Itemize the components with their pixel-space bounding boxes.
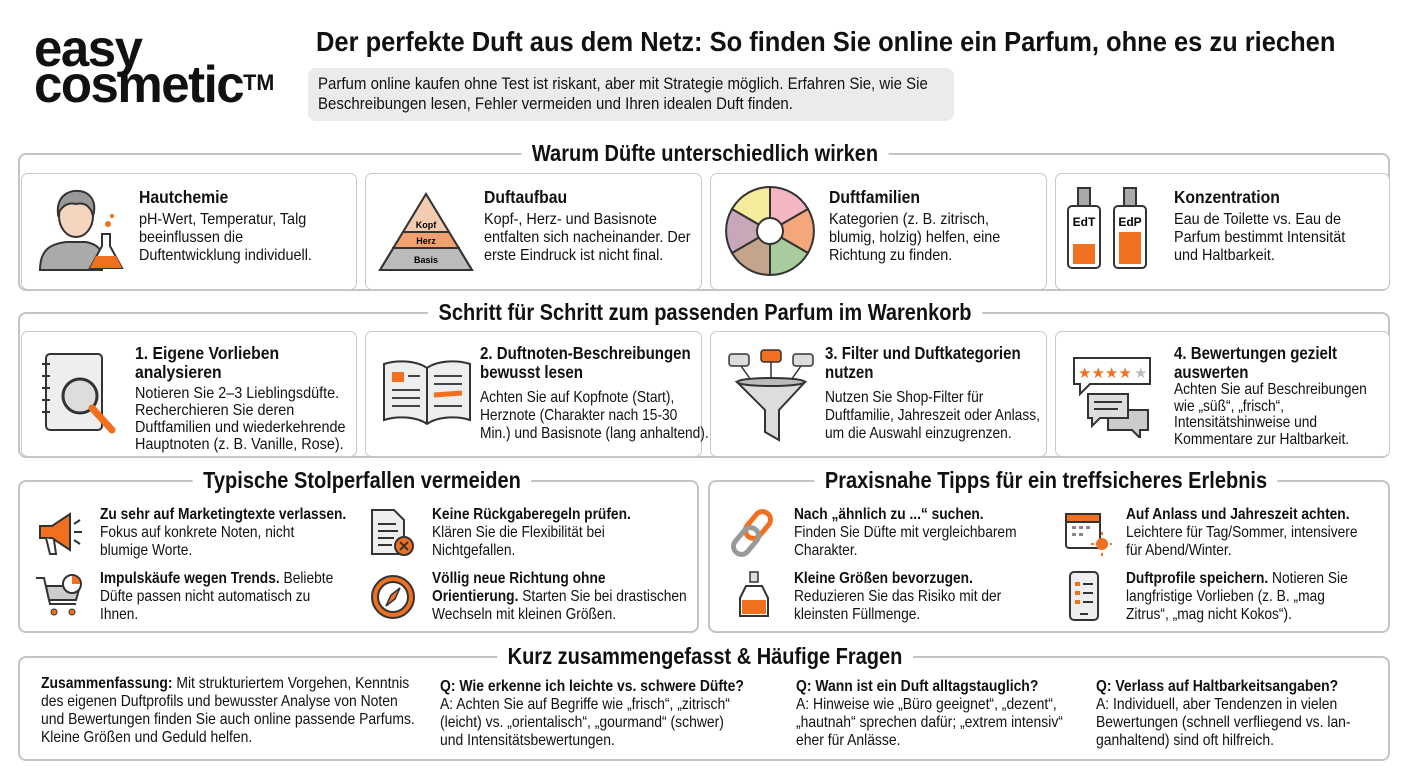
text: FAQ 1: (leicht) vs. „orientalisch“, „gourmand“ (schwer) — [440, 714, 724, 731]
text: Intensitätshinweise und — [1174, 414, 1317, 431]
logo: cosmeticTM — [34, 56, 274, 114]
text: FAQ 1: Q: Wie erkenne ich leichte vs. schwere Düfte? — [440, 678, 744, 695]
icon: megaphone — [39, 512, 82, 555]
icon: compass — [371, 575, 415, 619]
item: kleine Größen: Kleine Größen bevorzugen. — [794, 570, 973, 587]
icon: notebook with magnifier — [42, 353, 116, 434]
panel: Schritt für Schritt — [18, 312, 1390, 458]
text: pH-Wert, Temperatur, Talg — [139, 211, 306, 228]
icon: pyramid: Basis — [414, 255, 438, 265]
icon: calendar with sun — [1065, 513, 1112, 556]
item: Marketingtexte: Fokus auf konkrete Noten, nicht — [100, 524, 294, 541]
text: FAQ 2: A: Hinweise wie „Büro geeignet“, „dezent“, — [796, 696, 1057, 713]
item: ähnlich zu: Finden Sie Düfte mit vergleichbarem — [794, 524, 1017, 541]
text: analysieren — [135, 362, 222, 382]
panel: Typische Stolperfallen vermeiden — [18, 480, 699, 633]
text: 2. Duftnoten-Beschreibungen — [480, 343, 691, 363]
text: Duftfamilien — [829, 187, 920, 207]
text: FAQ 2 — [796, 678, 1063, 749]
item: Anlass und Jahreszeit — [1065, 506, 1357, 559]
icon: small perfume bottle — [739, 571, 769, 617]
item: Impulskäufe: Impulskäufe wegen Trends. Beliebte — [100, 570, 333, 587]
text: Achten Sie auf Beschreibungen — [1174, 381, 1367, 398]
heading: Typische Stolperfallen vermeiden — [203, 467, 521, 493]
text: FAQ 2: eher für Anlässe. — [796, 732, 900, 749]
text: summary: und Bewertungen finden Sie auch online passende Parfums. — [41, 711, 415, 728]
text: FAQ 2: „hautnah“ sprechen dafür; „extrem intensiv“ — [796, 714, 1063, 731]
icon: bottles EdT EdP — [1067, 187, 1147, 269]
text: summary — [41, 675, 415, 746]
text: Konzentration — [1174, 187, 1280, 207]
icon: review bubbles — [1073, 357, 1151, 438]
card: step 3 — [710, 331, 1047, 457]
item: kleine Größen: kleinsten Füllmenge. — [794, 606, 920, 623]
text: Eau de Toilette vs. Eau de — [1174, 211, 1341, 228]
item: neue Richtung: Völlig neue Richtung ohne — [432, 570, 606, 587]
text: Kommentare zur Haltbarkeit. — [1174, 430, 1349, 448]
icon: bottles EdT EdP: EdT — [1073, 215, 1096, 229]
subtitle: Parfum online kaufen ohne Test ist riskant, aber mit Strategie möglich. Erfahren Sie, wie Sie — [318, 75, 928, 93]
text: Parfum bestimmt Intensität — [1174, 229, 1345, 246]
text — [139, 187, 312, 264]
text: 3. Filter und Duftkategorien — [825, 343, 1021, 363]
text: Achten Sie auf Kopfnote (Start), — [480, 389, 674, 406]
item: Marketingtexte: Zu sehr auf Marketingtexte verlassen. — [100, 506, 346, 523]
text: Recherchieren Sie deren — [135, 402, 294, 419]
text: FAQ 1: A: Achten Sie auf Begriffe wie „frisch“, „zitrisch“ — [440, 696, 730, 713]
text: Min.) und Basisnote (lang anhaltend). — [480, 425, 709, 442]
item: Rückgaberegeln: Keine Rückgaberegeln prüfen. — [432, 506, 631, 523]
item: Impulskäufe — [36, 570, 333, 623]
icon: pyramid — [378, 192, 474, 271]
text: FAQ 3 — [1096, 678, 1351, 749]
item: kleine Größen — [739, 570, 1001, 623]
text — [825, 343, 1040, 442]
icon: cart with timer — [36, 574, 82, 616]
text: Kopf-, Herz- und Basisnote — [484, 211, 657, 228]
item: Anlass und Jahreszeit: Auf Anlass und Jahreszeit achten. — [1126, 506, 1350, 523]
text: summary: Zusammenfassung: Mit strukturiertem Vorgehen, Kenntnis — [41, 675, 409, 692]
icon: chain link — [731, 509, 773, 557]
card: step 4 — [1055, 331, 1390, 457]
text: Nutzen Sie Shop-Filter für — [825, 389, 983, 406]
item: Anlass und Jahreszeit: Leichtere für Tag/Sommer, intensivere — [1126, 524, 1357, 541]
icon: open book — [383, 360, 471, 426]
text: summary: Kleine Größen und Geduld helfen. — [41, 729, 252, 746]
card: Duftfamilien — [710, 173, 1047, 290]
text: um die Auswahl einzugrenzen. — [825, 425, 1012, 442]
text: FAQ 1 — [440, 678, 744, 749]
icon: phone list — [1069, 571, 1099, 621]
card: Konzentration — [1055, 173, 1390, 290]
heading: Warum Düfte unterschiedlich wirken — [532, 140, 878, 166]
heading: Schritt für Schritt zum passenden Parfum im Warenkorb — [439, 299, 971, 325]
text: FAQ 3: Bewertungen (schnell verfliegend vs. lan- — [1096, 714, 1351, 731]
text: Herznote (Charakter nach 15-30 — [480, 407, 677, 424]
subtitle: Beschreibungen lesen, Fehler vermeiden und Ihren idealen Duft finden. — [318, 95, 793, 113]
item: Rückgaberegeln: Klären Sie die Flexibilität bei — [432, 524, 605, 541]
panel: Warum Düfte unterschiedlich wirken — [18, 153, 1390, 291]
item: Duftprofile speichern — [1069, 570, 1348, 623]
heading: Praxisnahe Tipps für ein treffsicheres Erlebnis — [825, 467, 1267, 493]
text: nutzen — [825, 362, 873, 382]
item: Rückgaberegeln: Nichtgefallen. — [432, 542, 515, 559]
text: FAQ 3: A: Individuell, aber Tendenzen in vielen — [1096, 696, 1337, 713]
text: blumig, holzig) helfen, eine — [829, 229, 1000, 246]
item: ähnlich zu: Nach „ähnlich zu ...“ suchen. — [794, 506, 984, 523]
card: Duftaufbau — [365, 173, 702, 290]
text: Kategorien (z. B. zitrisch, — [829, 211, 989, 228]
text: und Haltbarkeit. — [1174, 247, 1275, 264]
text: 4. Bewertungen gezielt — [1174, 343, 1337, 363]
icon: pyramid: Herz — [416, 236, 436, 246]
item: Duftprofile speichern: Duftprofile speichern. Notieren Sie — [1126, 570, 1348, 587]
icon: bottles EdT EdP: EdP — [1118, 215, 1142, 229]
text: Hautchemie — [139, 187, 228, 207]
item: Marketingtexte: blumige Worte. — [100, 542, 192, 559]
card: step 2 — [365, 331, 702, 457]
item: neue Richtung — [371, 570, 687, 623]
text: Duftfamilien und wiederkehrende — [135, 419, 346, 436]
item: Anlass und Jahreszeit: für Abend/Winter. — [1126, 542, 1232, 559]
text: Duftfamilie, Jahreszeit oder Anlass, — [825, 407, 1040, 424]
text: FAQ 3: Q: Verlass auf Haltbarkeitsangaben? — [1096, 678, 1338, 695]
text: entfalten sich nacheinander. Der — [484, 229, 691, 246]
subtitle — [308, 68, 954, 121]
card: Hautchemie — [21, 173, 357, 290]
item: Impulskäufe: Ihnen. — [100, 606, 138, 623]
item: kleine Größen: Reduzieren Sie das Risiko mit der — [794, 588, 1001, 605]
text: Richtung zu finden. — [829, 247, 952, 264]
text: FAQ 1: und Intensitätsbewertungen. — [440, 732, 615, 749]
icon: pyramid: Kopf — [416, 220, 437, 230]
item: Duftprofile speichern: Zitrus“, „mag nicht Kokos“). — [1126, 606, 1292, 623]
text — [1174, 187, 1346, 264]
text: auswerten — [1174, 362, 1248, 382]
icon: funnel with tags — [728, 349, 814, 442]
text: Duftaufbau — [484, 187, 567, 207]
item: ähnlich zu — [731, 506, 1017, 559]
title: Der perfekte Duft aus dem Netz: So finden Sie online ein Parfum, ohne es zu riechen — [316, 26, 1335, 57]
panel: Praxisnahe Tipps — [708, 480, 1390, 633]
text — [484, 187, 691, 264]
item: ähnlich zu: Charakter. — [794, 542, 857, 559]
text: Notieren Sie 2–3 Lieblingsdüfte. — [135, 385, 339, 402]
text: summary: des eigenen Duftprofils und bewusster Analyse von Noten — [41, 693, 398, 710]
item: Marketingtexte — [39, 506, 346, 559]
text — [829, 187, 1000, 264]
icon: person with flask — [39, 190, 124, 271]
text: FAQ 3: ganhaltend) sind oft hilfreich. — [1096, 732, 1274, 749]
item: Impulskäufe: Düfte passen nicht automatisch zu — [100, 588, 310, 605]
icon: scent wheel — [725, 186, 815, 276]
text: bewusst lesen — [480, 362, 583, 382]
heading: Kurz zusammengefasst & Häufige Fragen — [508, 643, 902, 669]
text: 1. Eigene Vorlieben — [135, 343, 279, 363]
icon: review bubbles: ★ — [1134, 364, 1147, 382]
item: Rückgaberegeln — [371, 506, 631, 559]
text: Hauptnoten (z. B. Vanille, Rose). — [135, 436, 344, 453]
item: neue Richtung: Wechseln mit kleinen Größen. — [432, 606, 616, 623]
panel: Kurz zusammengefasst & Häufige Fragen — [18, 656, 1390, 761]
text — [135, 343, 346, 453]
logo — [34, 20, 274, 114]
text: FAQ 2: Q: Wann ist ein Duft alltagstauglich? — [796, 678, 1038, 695]
icon: review bubbles: ★★★★ — [1078, 364, 1132, 382]
text: erste Eindruck ist nicht final. — [484, 247, 663, 264]
item: Duftprofile speichern: langfristige Vorlieben (z. B. „mag — [1126, 588, 1325, 605]
text: wie „süß“, „frisch“, — [1174, 398, 1284, 414]
text — [1174, 343, 1367, 448]
text: Duftentwicklung individuell. — [139, 247, 312, 264]
text — [480, 343, 709, 442]
item: neue Richtung: Orientierung. Starten Sie bei drastischen — [432, 588, 687, 605]
icon: document with x — [371, 509, 414, 556]
text: beeinflussen die — [139, 229, 243, 246]
card: step 1 — [21, 331, 357, 457]
logo: easy — [34, 20, 141, 78]
